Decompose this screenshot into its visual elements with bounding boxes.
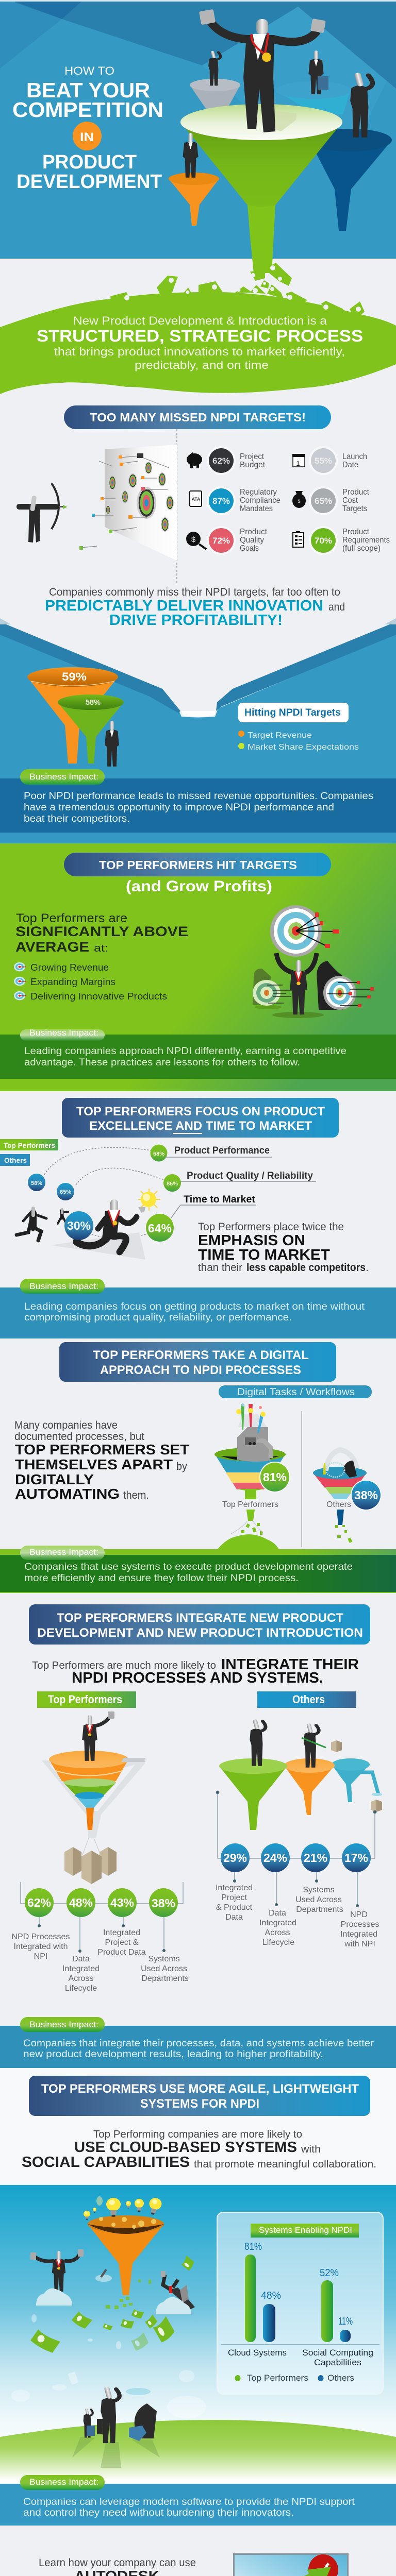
legend: Others	[327, 2373, 354, 2383]
chart title	[219, 1385, 372, 1398]
icon: orange funnel with bulbs	[84, 2196, 164, 2295]
heading: agile lightweight systems: SYSTEMS FOR NPDI	[140, 2097, 259, 2111]
label: others: Others	[292, 1693, 325, 1706]
stat: regulatory compliance: Mandates	[240, 504, 273, 513]
chart point: 48%: Lifecycle	[65, 1984, 97, 1993]
panel: business impact 2: advantage. These practices are lessons for others to follow.	[24, 1057, 300, 1068]
stat: product cost: 65%	[315, 496, 332, 506]
text block: digitally automating: THEMSELVES APART	[15, 1456, 173, 1472]
icon: money pile	[217, 1510, 279, 1550]
chart point: product quality	[163, 1171, 316, 1192]
chart point: 43%: Product Data	[97, 1948, 146, 1957]
icon: nested funnels	[42, 1751, 145, 1855]
stat: regulatory compliance	[207, 486, 280, 515]
heading: product excellence and time to market: TOP PERFORMERS FOCUS ON PRODUCT	[76, 1105, 325, 1118]
chart point: 29%: Data	[225, 1913, 243, 1922]
text block: intro: New Product Development & Introduction is a	[73, 314, 327, 327]
chart point: 17%: Integrated	[340, 1930, 377, 1939]
text block: emphasis on time to market: Top Performers place twice the	[198, 1221, 344, 1233]
heading: too many missed targets	[64, 405, 331, 429]
text block: at:	[94, 943, 108, 954]
icon: grey funnel	[190, 79, 240, 109]
chart point: 29%: 29%	[223, 1851, 247, 1865]
icon: green funnel	[219, 1758, 287, 1830]
stat: product requirements	[309, 526, 390, 555]
stat: project budget	[207, 446, 266, 475]
text block: intro: that brings product innovations to market efficiently,	[54, 345, 345, 358]
icon: cheering figure on cloud	[30, 2249, 84, 2306]
chart point: 29%: Integrated	[216, 1884, 253, 1892]
icon: targets	[79, 453, 174, 550]
stat: project budget: 62%	[212, 456, 230, 466]
heading: agile lightweight systems	[29, 2076, 370, 2116]
chart point: 21%: Used Across	[295, 1895, 342, 1904]
legend: Top Performers	[4, 1141, 55, 1149]
icon: archer	[16, 483, 68, 543]
panel: sky illustration	[0, 2185, 396, 2484]
text block: cloud-based systems: with	[301, 2144, 321, 2155]
text block: digitally automating: TOP PERFORMERS SET	[15, 1442, 189, 1458]
icon: money bag: $	[298, 499, 301, 504]
panel: hero header	[0, 0, 396, 273]
chart title: Digital Tasks / Workflows	[237, 1387, 355, 1398]
chart point: 48%: 48%	[69, 1896, 93, 1909]
stat: product cost	[309, 486, 370, 515]
stat: product requirements: Requirements	[342, 536, 390, 545]
icon: orange funnel	[284, 1758, 335, 1815]
icon: piggy bank	[187, 452, 202, 468]
label: others: Others	[326, 1500, 351, 1509]
chart point: 38%	[141, 1888, 189, 1983]
text block: digitally automating: by	[176, 1461, 187, 1472]
chart point: 48%	[62, 1888, 100, 1993]
stat: product requirements: Product	[342, 528, 370, 536]
heading: (and Grow Profits)	[126, 878, 272, 895]
bar chart: Cloud Systems	[228, 2348, 287, 2358]
icon: checklist	[293, 531, 304, 547]
text block: digitally automating: AUTOMATING	[15, 1486, 120, 1502]
chart point: 17%: 17%	[344, 1851, 368, 1865]
panel: business impact 2: Leading companies approach NPDI differently, earning a competitive	[24, 1046, 346, 1057]
bar chart: 11%	[338, 2316, 353, 2327]
text block: digitally automating: documented processes, but	[14, 1431, 144, 1443]
legend: Top Performers	[247, 2373, 308, 2383]
label: top performers	[37, 1691, 136, 1708]
stat: product quality: Product	[240, 528, 268, 536]
icon: figures holding targets	[253, 905, 374, 1018]
icon: magnifier with dollar	[186, 532, 206, 549]
panel: business impact 4: Business Impact:	[29, 1547, 98, 1557]
title: COMPETITION	[12, 98, 163, 122]
chart point: 38%: 38%	[354, 1488, 378, 1502]
icon: seated figure with briefcase	[308, 50, 328, 94]
chart point: 64%: 64%	[148, 1222, 172, 1235]
chart point: 17%: Processes	[341, 1920, 379, 1929]
icon: figure scratching head	[350, 73, 372, 138]
panel: business impact 6: Business Impact:	[29, 2477, 98, 2487]
label: top performers: Top Performers	[222, 1500, 278, 1509]
chart point: 62%: 62%	[27, 1896, 51, 1909]
text block: digitally automating: them.	[123, 1489, 149, 1501]
heading: TOP PERFORMERS HIT TARGETS	[99, 858, 297, 872]
bar chart: Capabilities	[314, 2358, 361, 2367]
text block: digitally automating: Many companies have	[14, 1419, 118, 1431]
label: others	[257, 1691, 356, 1708]
bar chart: 48%	[261, 2290, 281, 2301]
chart point: 81%	[259, 1462, 290, 1493]
chart point: 24%	[259, 1843, 296, 1947]
text block: emphasis on time to market	[198, 1221, 369, 1274]
text block: emphasis on time to market: EMPHASIS ON	[198, 1232, 305, 1249]
panel: others integration	[216, 1691, 382, 1948]
stat: product quality: Quality	[240, 536, 264, 545]
icon: dark blue funnel	[309, 129, 392, 231]
heading: digital approach: APPROACH TO NPDI PROCESSES	[100, 1363, 301, 1377]
chart point: others 65%: 65%	[60, 1189, 71, 1195]
stat: product requirements: (full scope)	[342, 544, 381, 553]
text block: intro: STRUCTURED, STRATEGIC PROCESS	[37, 327, 363, 345]
legend: Target Revenue	[248, 731, 312, 740]
chart point: 24%: Data	[269, 1909, 286, 1918]
chart point: 62%: Integrated with	[14, 1942, 68, 1951]
chart point: 62%: NPI	[34, 1952, 47, 1961]
panel: top performers integration	[12, 1691, 189, 1993]
icon: magnifier with dollar: $	[191, 535, 196, 544]
text block	[15, 911, 188, 955]
legend	[238, 731, 359, 752]
stat: product requirements: 70%	[315, 536, 332, 546]
panel: business impact 2	[0, 1028, 396, 1079]
chart panel: systems enabling NPDI	[217, 2212, 383, 2394]
stat: regulatory compliance: 87%	[212, 496, 230, 506]
icon: presentation screen with growth arrow	[234, 2554, 366, 2576]
heading: digital approach: TOP PERFORMERS TAKE A DIGITAL	[93, 1348, 309, 1362]
text block: Top Performers are	[16, 911, 127, 925]
chart point: 38%: Used Across	[141, 1964, 187, 1973]
panel: business impact 6	[0, 2475, 396, 2526]
icon: money bag	[292, 491, 306, 508]
chart title	[238, 703, 349, 722]
panel: missed targets stats	[186, 446, 390, 555]
text block: integrate processes: NPDI PROCESSES AND SYSTEMS.	[72, 1670, 323, 1686]
panel: business impact 5: Business Impact:	[29, 2020, 98, 2029]
heading: too many missed targets: TOO MANY MISSED NPDI TARGETS!	[90, 411, 306, 424]
stat: product cost: Targets	[342, 504, 367, 513]
icon: falling money	[30, 2256, 195, 2385]
heading: product excellence and time to market	[62, 1098, 339, 1138]
stat: project budget: Project	[240, 452, 265, 461]
chart point: product quality: Product Quality / Reliability	[187, 1171, 313, 1181]
list with target bullets: Expanding Margins	[30, 977, 116, 987]
stat: regulatory compliance: Regulatory	[240, 488, 277, 497]
connector lines	[21, 1882, 183, 1904]
stat: project budget: Budget	[240, 461, 266, 469]
chart point: 43%: Project &	[105, 1938, 139, 1947]
chart point: others 58%: 58%	[31, 1180, 42, 1187]
panel: business impact 1: Business Impact:	[29, 772, 98, 782]
text block: cloud-based systems: Top Performing companies are more likely to	[93, 2129, 302, 2140]
chart point: 38%: 38%	[152, 1896, 175, 1910]
chart point: product quality: 86%	[167, 1181, 178, 1187]
icon: calendar	[292, 454, 305, 467]
heading: integrate NPD and NPI: DEVELOPMENT AND NEW PRODUCT INTRODUCTION	[37, 1626, 363, 1640]
panel: business impact 1	[0, 769, 396, 833]
chart point: 29%: & Product	[216, 1903, 253, 1912]
heading: agile lightweight systems: TOP PERFORMERS USE MORE AGILE, LIGHTWEIGHT	[41, 2082, 359, 2096]
title: PRODUCT	[42, 151, 137, 173]
icon: stacked boxes	[64, 1847, 117, 1884]
panel: business impact 3: Business Impact:	[29, 1281, 98, 1291]
chart title: Hitting NPDI Targets	[244, 707, 341, 718]
icon: figure on orange funnel	[183, 133, 199, 178]
chart: top performers funnel	[214, 1403, 286, 1499]
chart point: 21%: 21%	[304, 1851, 327, 1865]
icon: figure with medal waving	[82, 1711, 114, 1761]
connector lines	[216, 1791, 376, 1858]
chart point: others 58%	[28, 1174, 45, 1191]
panel: business impact 5: Companies that integrate their processes, data, and systems achieve better	[23, 2038, 374, 2049]
icon: small figure on cloud	[95, 2269, 112, 2282]
stat: launch date: 55%	[315, 456, 332, 466]
chart point: 17%	[340, 1843, 379, 1948]
label: top performers: Top Performers	[48, 1693, 122, 1706]
icon: few bills	[335, 1510, 352, 1543]
list with target bullets: Delivering Innovative Products	[30, 991, 167, 1002]
text block: autodesk fusion lifecycle	[36, 2557, 202, 2576]
panel: digital tasks comparison	[14, 1385, 382, 1550]
panel: archer and target wall	[16, 445, 177, 561]
stat: launch date: Launch	[342, 452, 367, 461]
text block: integrate processes: Top Performers are much more likely to	[32, 1660, 216, 1671]
chart: others funnel	[313, 1450, 367, 1499]
text block: predictably deliver innovation: PREDICTABLY DELIVER INNOVATION	[45, 598, 323, 614]
chart point: 30%: 30%	[67, 1219, 91, 1232]
chart point: time to market: Time to Market	[184, 1194, 256, 1205]
stat: launch date: Date	[342, 461, 358, 469]
chart point: 17%: NPD	[350, 1910, 368, 1919]
chart: funnels 59% and 58%: 58%	[86, 698, 101, 707]
icon: orange funnel	[169, 173, 219, 226]
icon: rule book: ATA	[192, 497, 200, 502]
text block: predictably deliver innovation: and	[328, 601, 345, 613]
chart point: product performance	[151, 1145, 272, 1161]
panel: business impact 1: have a tremendous opportunity to improve NPDI performance and	[24, 802, 334, 813]
chart point: 62%: NPD Processes	[12, 1933, 70, 1941]
icon: figure on grey funnel	[208, 50, 221, 86]
chart point: 21%	[295, 1843, 343, 1914]
chart point: 81%: 81%	[263, 1470, 287, 1484]
chart point: 64%	[145, 1213, 174, 1242]
chart point: 17%: with NPI	[344, 1940, 375, 1948]
panel: business impact 4: Companies that use systems to execute product development operate	[24, 1562, 353, 1572]
text block: cloud-based systems: SOCIAL CAPABILITIES	[22, 2154, 190, 2171]
icon: figure pushing box	[302, 1723, 342, 1768]
legend	[0, 1139, 58, 1166]
legend	[235, 2373, 354, 2383]
text block: SIGNFICANTLY ABOVE	[15, 924, 188, 939]
panel: business impact 6: Companies can leverage modern software to provide the NPDI support	[23, 2497, 355, 2507]
icon: lightbulb	[138, 1189, 160, 1213]
chart point: 24%: Lifecycle	[262, 1938, 294, 1947]
chart point: 21%: Systems	[303, 1886, 335, 1894]
chart point: 48%: Across	[69, 1974, 93, 1983]
text block: cloud-based systems: that promote meaningful collaboration.	[194, 2159, 376, 2170]
icon: winner figure with medal	[199, 9, 326, 132]
chart point: 43%	[97, 1888, 146, 1957]
hill	[0, 2370, 396, 2481]
stat: product quality	[207, 526, 268, 555]
panel: top performers hit targets	[0, 843, 396, 1091]
chart point: 21%: Departments	[296, 1905, 343, 1914]
bar chart	[221, 2241, 380, 2367]
chart point: 24%: Integrated	[259, 1919, 296, 1927]
title	[12, 64, 163, 193]
panel: business impact 3	[0, 1279, 396, 1338]
panel: business impact 1: beat their competitors.	[24, 814, 130, 824]
title: BEAT YOUR	[26, 78, 150, 102]
text block: integrate processes: INTEGRATE THEIR	[221, 1656, 359, 1673]
list with target bullets: Growing Revenue	[30, 962, 109, 973]
icon: figure looking down	[105, 721, 119, 767]
chart title: Systems Enabling NPDI	[259, 2225, 352, 2235]
panel: business impact 6: and control they need without burdening their innovators.	[23, 2507, 294, 2518]
chart point: others 65%	[57, 1183, 74, 1200]
chart: funnels 59% and 58%: 59%	[62, 670, 87, 683]
chart point: 24%: Across	[265, 1928, 290, 1937]
icon: calendar: 1	[296, 460, 300, 467]
text block: cloud-based systems: USE CLOUD-BASED SYSTEMS	[74, 2139, 297, 2156]
icon: green funnel	[180, 104, 342, 273]
bar chart: 81%	[244, 2241, 262, 2252]
chart point: 38%	[351, 1480, 382, 1511]
icon: group of figures on hill	[72, 2386, 160, 2468]
panel: hitting NPDI targets	[0, 618, 396, 843]
panel: business impact 3: Leading companies focus on getting products to market on time without	[24, 1301, 365, 1312]
heading: integrate NPD and NPI	[29, 1604, 370, 1645]
panel: agile systems intro	[0, 2068, 396, 2185]
chart point: time to market	[171, 1194, 256, 1218]
stat: product cost: Cost	[342, 496, 358, 505]
text block: digitally automating	[14, 1419, 189, 1502]
panel: business impact 3: compromising product quality, reliability, or performance.	[24, 1312, 292, 1323]
chart point: 48%: Integrated	[62, 1964, 100, 1973]
icon: rule book	[190, 491, 202, 506]
text block: emphasis on time to market: less capable competitors	[246, 1262, 366, 1274]
chart point: 38%: Departments	[141, 1974, 189, 1983]
text block: digitally automating: DIGITALLY	[15, 1471, 94, 1487]
icon: falling figure on cloud	[156, 2271, 195, 2314]
chart point: 48%: Data	[72, 1955, 90, 1963]
text block: predictably deliver innovation	[45, 586, 345, 629]
icon: money bills	[110, 263, 365, 319]
text block: emphasis on time to market: than their	[198, 1262, 242, 1274]
icon: light blue funnel	[276, 81, 351, 114]
text block: intro	[37, 314, 363, 371]
stat: product quality: 72%	[212, 536, 230, 546]
stat: launch date	[309, 446, 367, 475]
heading: digital approach	[59, 1342, 336, 1382]
title: HOW TO	[64, 64, 114, 77]
text block: predictably deliver innovation: Companies commonly miss their NPDI targets, far too often to	[49, 586, 340, 598]
panel: business impact 2: Business Impact:	[29, 1028, 98, 1038]
text block: cloud-based systems	[22, 2129, 376, 2171]
chart point: 24%: 24%	[263, 1851, 287, 1865]
text block: autodesk fusion lifecycle: Learn how your company can use	[39, 2557, 196, 2569]
icon: teal funnel with pipe	[332, 1758, 382, 1812]
text block: predictably deliver innovation: DRIVE PROFITABILITY!	[109, 612, 283, 629]
chart: funnels 59% and 58%	[27, 667, 124, 764]
panel: business impact 5	[0, 2017, 396, 2068]
stat: product quality: Goals	[240, 544, 259, 553]
legend: Others	[4, 1156, 27, 1164]
panel: money pile intro	[0, 263, 396, 394]
bar chart: 52%	[320, 2267, 339, 2279]
icon: running figures	[16, 1199, 145, 1260]
chart point: 43%: 43%	[110, 1896, 134, 1909]
stat: regulatory compliance: Compliance	[240, 496, 280, 505]
chart point: 62%	[12, 1888, 70, 1961]
text block: emphasis on time to market: TIME TO MARKET	[198, 1247, 330, 1263]
heading: integrate NPD and NPI: TOP PERFORMERS INTEGRATE NEW PRODUCT	[57, 1611, 343, 1625]
panel: business impact 4	[0, 1546, 396, 1593]
panel: business impact 4: more efficiently and ensure they follow their NPDI process.	[24, 1573, 299, 1584]
bar chart: Social Computing	[302, 2348, 373, 2358]
heading: product excellence and time to market: EXCELLENCE AND TIME TO MARKET	[89, 1119, 312, 1133]
heading	[64, 853, 331, 895]
legend: Market Share Expectations	[248, 743, 359, 752]
text block: integrate processes	[32, 1656, 359, 1686]
panel: top performers priorities	[0, 1139, 369, 1274]
icon: figure reading	[250, 1719, 266, 1766]
chart point: 29%: Project	[221, 1893, 247, 1902]
title: IN	[80, 130, 94, 144]
chart point: 30%	[64, 1211, 93, 1240]
chart title	[251, 2224, 359, 2238]
title: DEVELOPMENT	[16, 171, 162, 193]
text block: intro: predictably, and on time	[135, 359, 269, 371]
chart point: 43%: Integrated	[103, 1928, 140, 1937]
chart point: 29%	[216, 1843, 253, 1922]
text block: AVERAGE	[15, 939, 89, 955]
panel: business impact 1: Poor NPDI performance leads to missed revenue opportunities. Companies	[24, 791, 373, 802]
list with target bullets	[14, 962, 167, 1002]
chart point: product performance: 68%	[153, 1151, 164, 1157]
panel: business impact 5: new product development results, leading to higher profitability.	[23, 2049, 323, 2060]
stat: product cost: Product	[342, 488, 370, 497]
chart point: product performance: Product Performance	[174, 1145, 270, 1156]
chart point: 38%: Systems	[148, 1955, 180, 1963]
text block: emphasis on time to market: .	[366, 1262, 369, 1274]
